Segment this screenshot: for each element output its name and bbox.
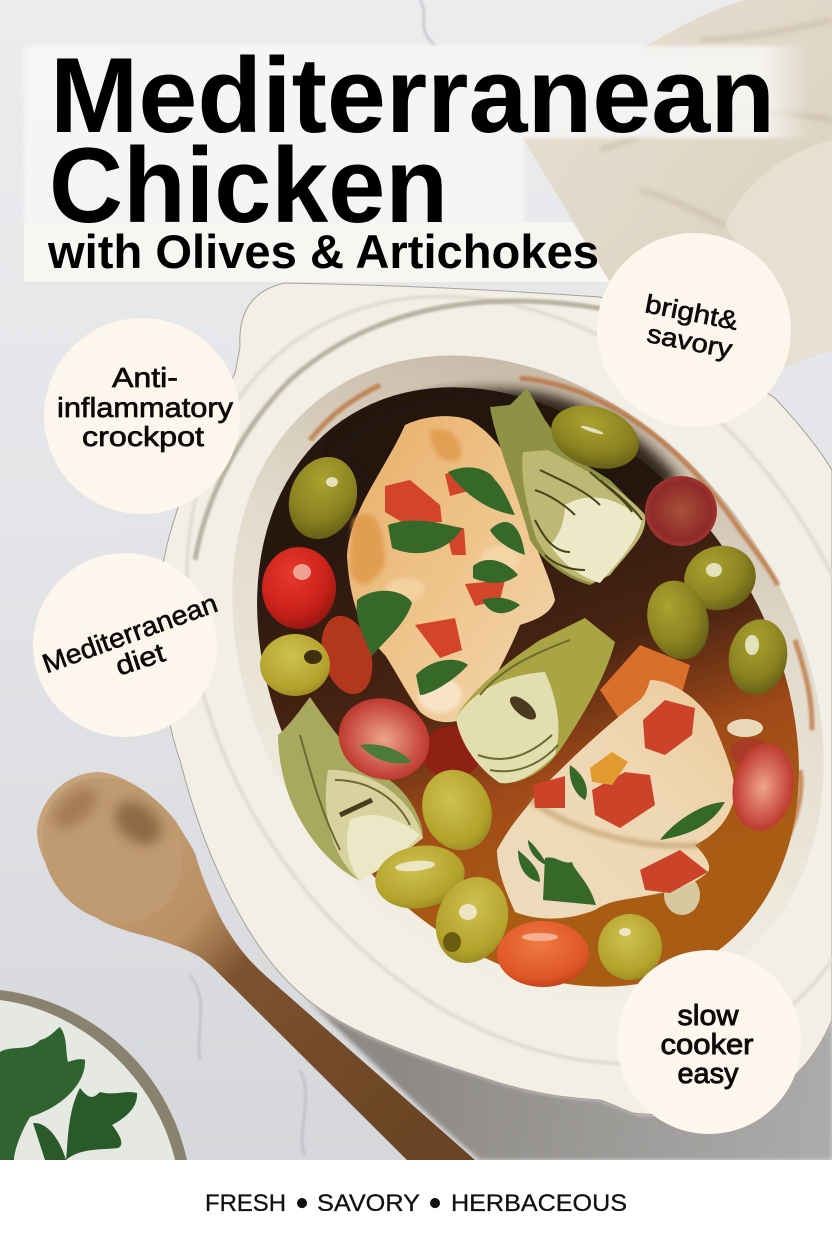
badge: slow cooker easy (617, 950, 801, 1134)
badge: anti-inflammatory crockpot: crockpot (82, 421, 204, 452)
artichoke center (456, 618, 615, 783)
pot outer body with handles (160, 283, 832, 1115)
chicken breast upper (347, 416, 555, 722)
footer tagline: FRESH (205, 1190, 286, 1217)
pot rim dark groove top-left (195, 301, 620, 560)
subtitle: with Olives & Artichokes (47, 225, 599, 278)
fold shadow (530, 800, 700, 846)
badge: anti-inflammatory crockpot (44, 318, 240, 514)
title backdrop glow (24, 46, 809, 282)
badge: anti-inflammatory crockpot: inflammatory (57, 392, 233, 423)
parsley (357, 467, 525, 695)
badge: slow cooker easy: easy (678, 1058, 739, 1090)
badge: anti-inflammatory crockpot: Anti- (112, 362, 178, 393)
parsley leaf large (0, 1027, 85, 1160)
footer tagline: SAVORY (317, 1190, 420, 1217)
sauce stains (310, 378, 812, 870)
olives (260, 395, 793, 980)
badge: bright & savory: bright& (643, 288, 741, 336)
title line: Chicken: Chicken (49, 125, 448, 245)
wooden spoon (13, 749, 475, 1160)
marble veins (190, 0, 435, 1155)
title line: Mediterranean: Mediterranean (50, 35, 775, 155)
chopped tomato behind chicken (313, 610, 770, 915)
parsley (518, 765, 725, 905)
dark top of sauce (330, 389, 680, 520)
chicken breast lower (497, 680, 735, 919)
footer tagline: • (429, 1182, 441, 1223)
parsley leaf small (33, 1088, 137, 1160)
pot inner wall (110, 241, 832, 1119)
towel (522, 0, 832, 367)
tomato pieces (533, 700, 708, 893)
title (47, 35, 775, 278)
slow cooker (43, 162, 832, 1198)
sauce (145, 283, 832, 1091)
pot rim grooves (43, 162, 832, 1198)
footer tagline (205, 1182, 627, 1223)
artichoke lower left (278, 697, 423, 881)
badge: slow cooker easy: cooker (660, 1029, 754, 1061)
badge: bright & savory: savory (645, 318, 735, 364)
badge: bright & savory (597, 233, 791, 427)
plate with parsley (0, 990, 187, 1160)
badge: Mediterranean diet (33, 553, 222, 737)
chicken shading (350, 429, 520, 713)
badge: slow cooker easy: slow (678, 1000, 740, 1032)
olive highlights (326, 424, 759, 936)
shadow under the pot (300, 993, 832, 1160)
tomato pieces (385, 468, 505, 658)
footer tagline: HERBACEOUS (451, 1190, 627, 1217)
badge: Mediterranean diet: Mediterranean (38, 588, 222, 679)
footer band (0, 1160, 832, 1248)
tomatoes (262, 476, 800, 987)
artichoke upper right (490, 388, 645, 585)
badge: Mediterranean diet: diet (112, 637, 169, 681)
footer tagline: • (296, 1182, 308, 1223)
